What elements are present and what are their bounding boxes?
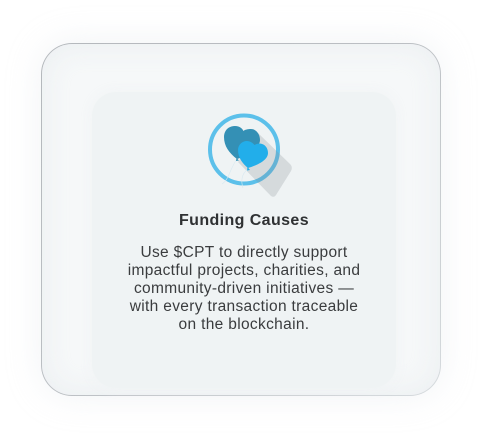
title: Funding Causes [179,212,309,229]
text block: description: Use $CPT to directly support [140,244,348,261]
text block: description: community-driven initiatives — [134,280,354,297]
balloon strings [222,159,248,188]
panel: outer card fill [42,44,440,395]
long shadow [238,133,292,197]
panel: inner card [92,92,396,388]
text block: description: on the blockchain. [179,316,309,333]
panel: outer card border [41,43,441,396]
text block: description: impactful projects, charities, and [128,262,360,279]
light balloon knot [247,167,250,170]
dark balloon knot [236,158,239,161]
icon: heart balloons in ring [208,114,292,197]
dark heart balloon [224,126,260,159]
panel: outer glow [42,43,440,395]
text block: description [128,244,360,333]
light heart balloon [238,141,268,168]
ring [210,116,278,184]
text block: description: with every transaction traceable [130,298,358,315]
